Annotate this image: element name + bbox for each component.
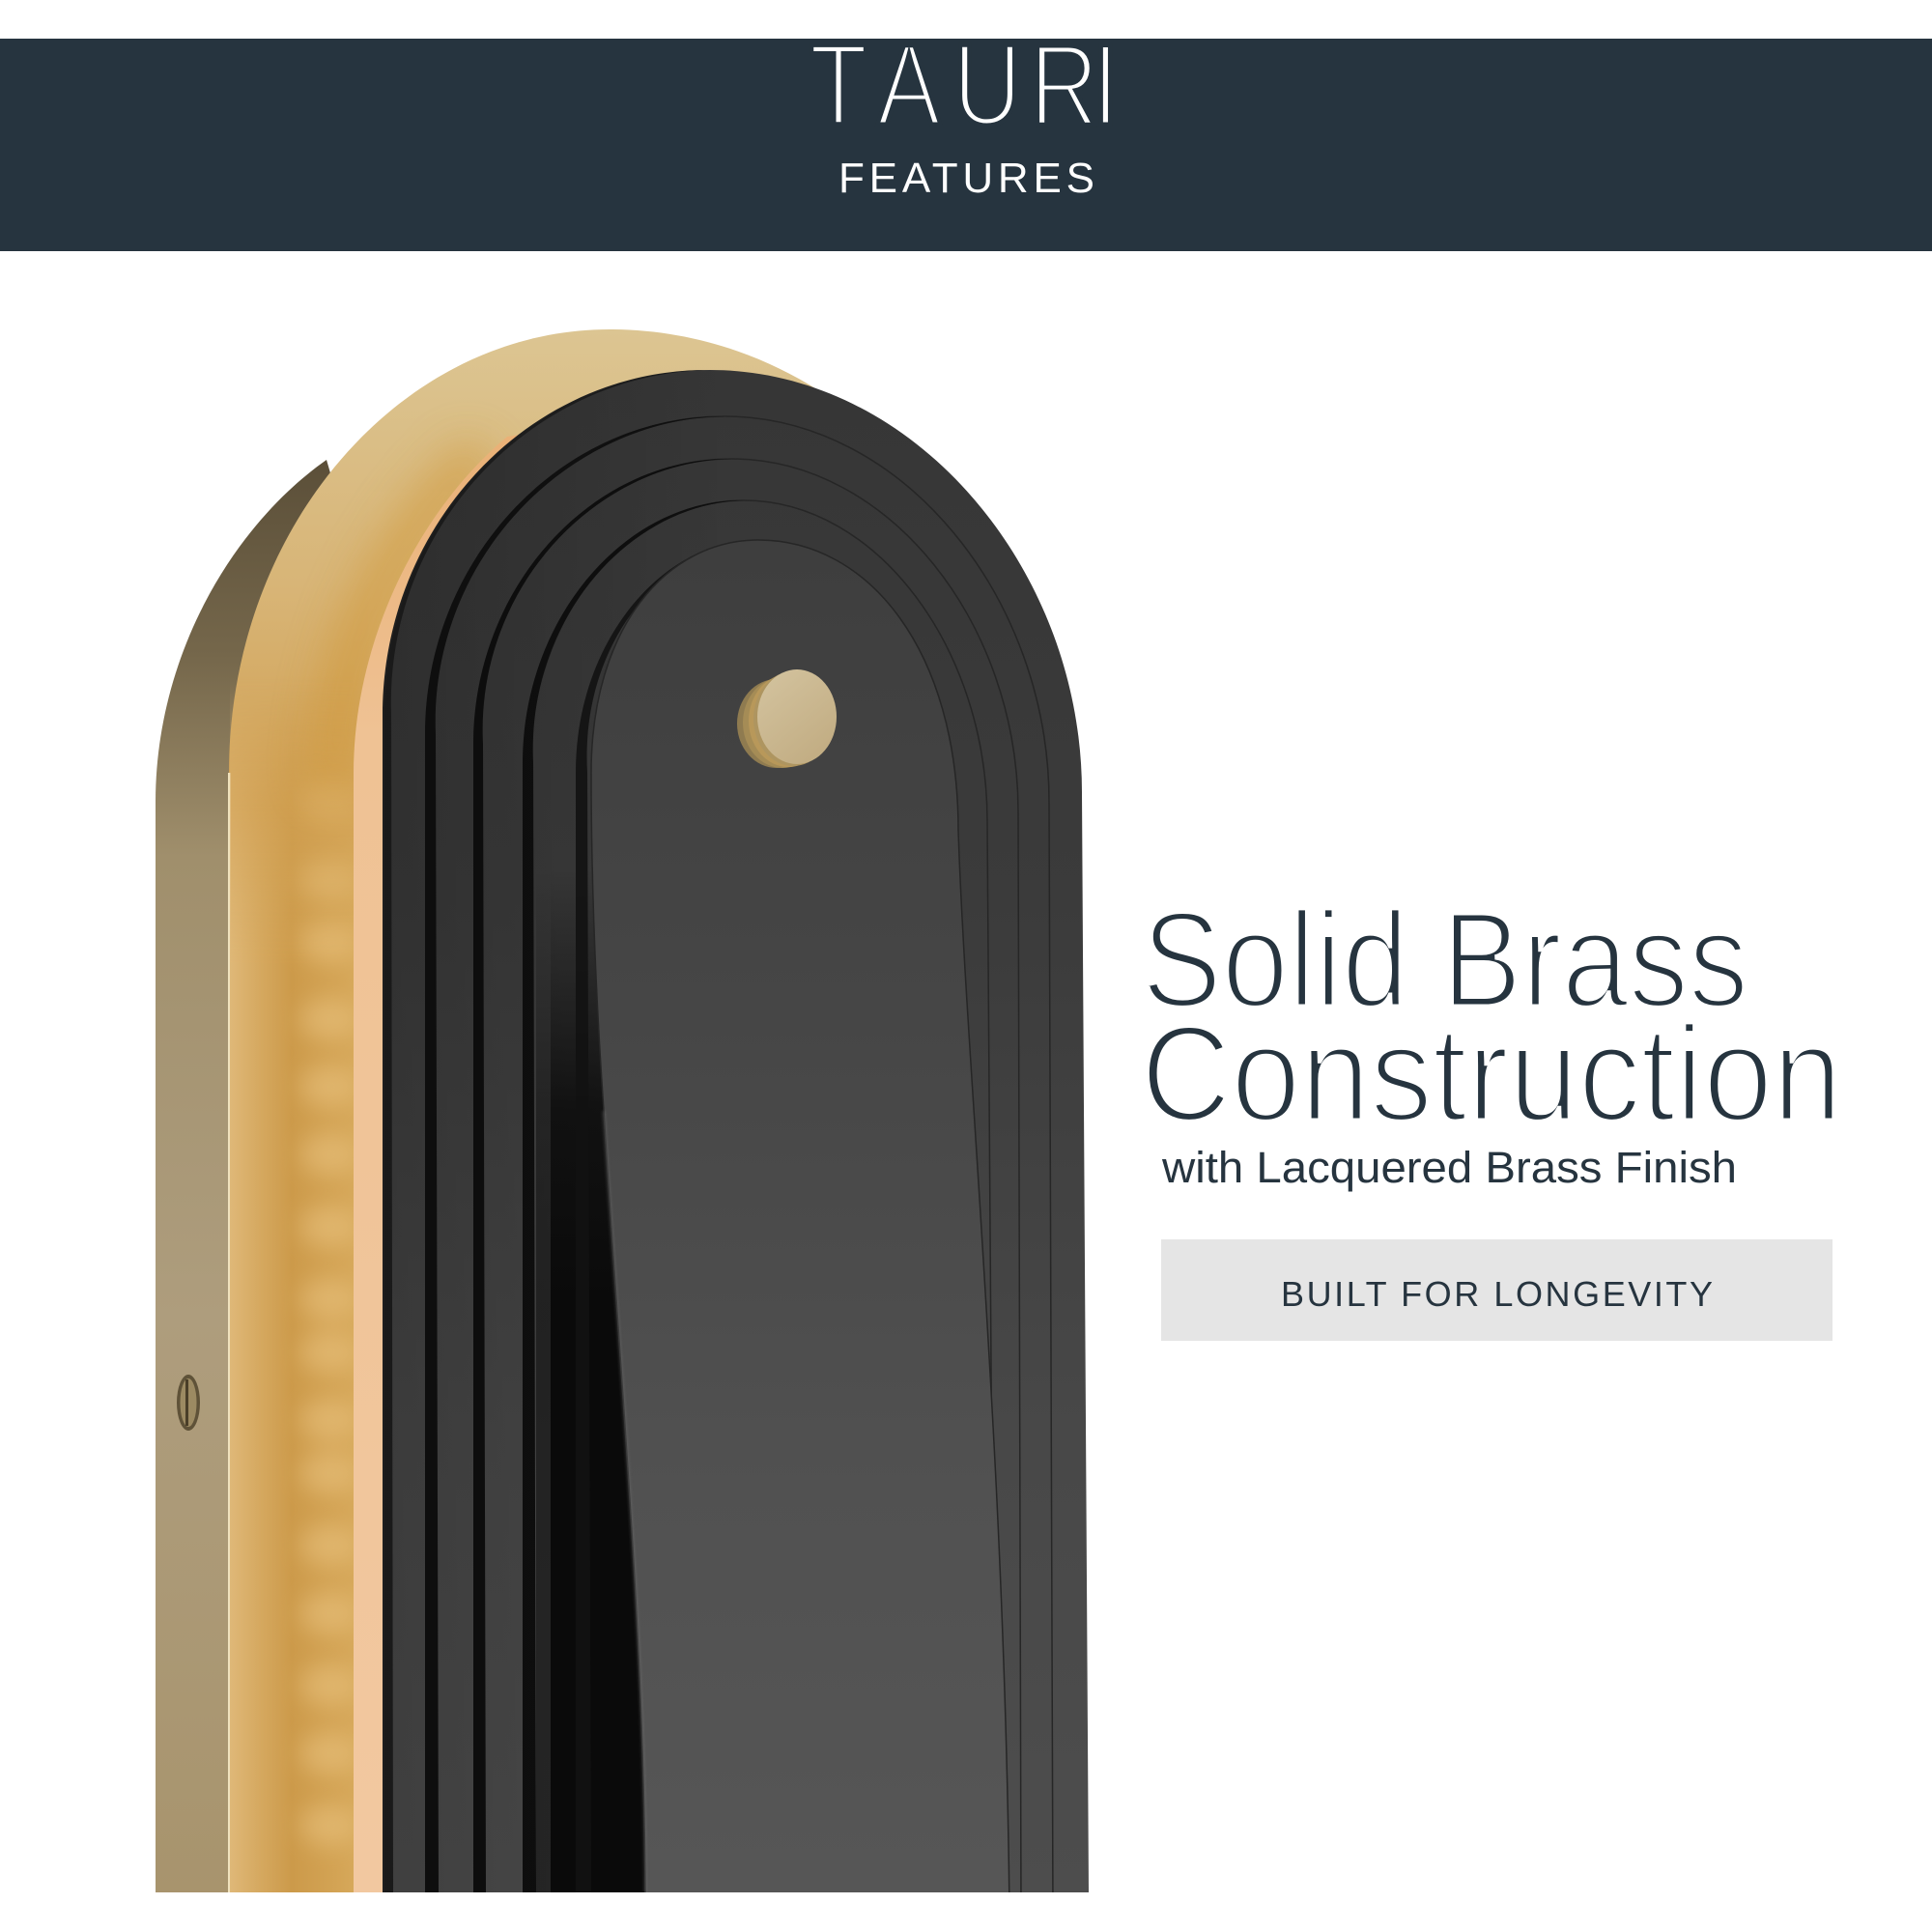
callout: built for longevity (1161, 1239, 1833, 1341)
heading: Solid Brass Construction: Construction (1141, 997, 1842, 1150)
ring 5 shadow (576, 556, 692, 1059)
heading: Solid Brass Construction (1148, 910, 1832, 1120)
step ring 3 (473, 459, 1021, 1913)
callout: built for longevity: BUILT FOR LONGEVITY (1281, 1274, 1713, 1314)
bronze side edge (156, 460, 333, 1892)
title: TAURI: TAURI (810, 21, 1119, 150)
heading: Solid Brass Construction: Solid Brass (1142, 883, 1748, 1036)
peach diffuser strip (354, 435, 518, 1892)
panel edge highlight (604, 1111, 645, 1892)
step ring 4 (523, 500, 995, 1913)
step ring 2 (425, 416, 1053, 1913)
black stepped body (383, 370, 1089, 1913)
warm glow band on plate (230, 628, 357, 1892)
screw (177, 1375, 200, 1431)
product photo: Tauri sconce (156, 329, 1842, 1913)
central arched panel (591, 540, 1009, 1913)
left shading (391, 531, 521, 1892)
header banner (0, 21, 1932, 251)
brass knob (737, 669, 837, 768)
feature copy (1141, 883, 1842, 1341)
deep shadow wedge (536, 921, 645, 1892)
subtitle: FEATURES: FEATURES (838, 155, 1094, 202)
subheading: with Lacquered Brass Finish (1161, 1143, 1737, 1192)
brass back plate (228, 329, 814, 1892)
